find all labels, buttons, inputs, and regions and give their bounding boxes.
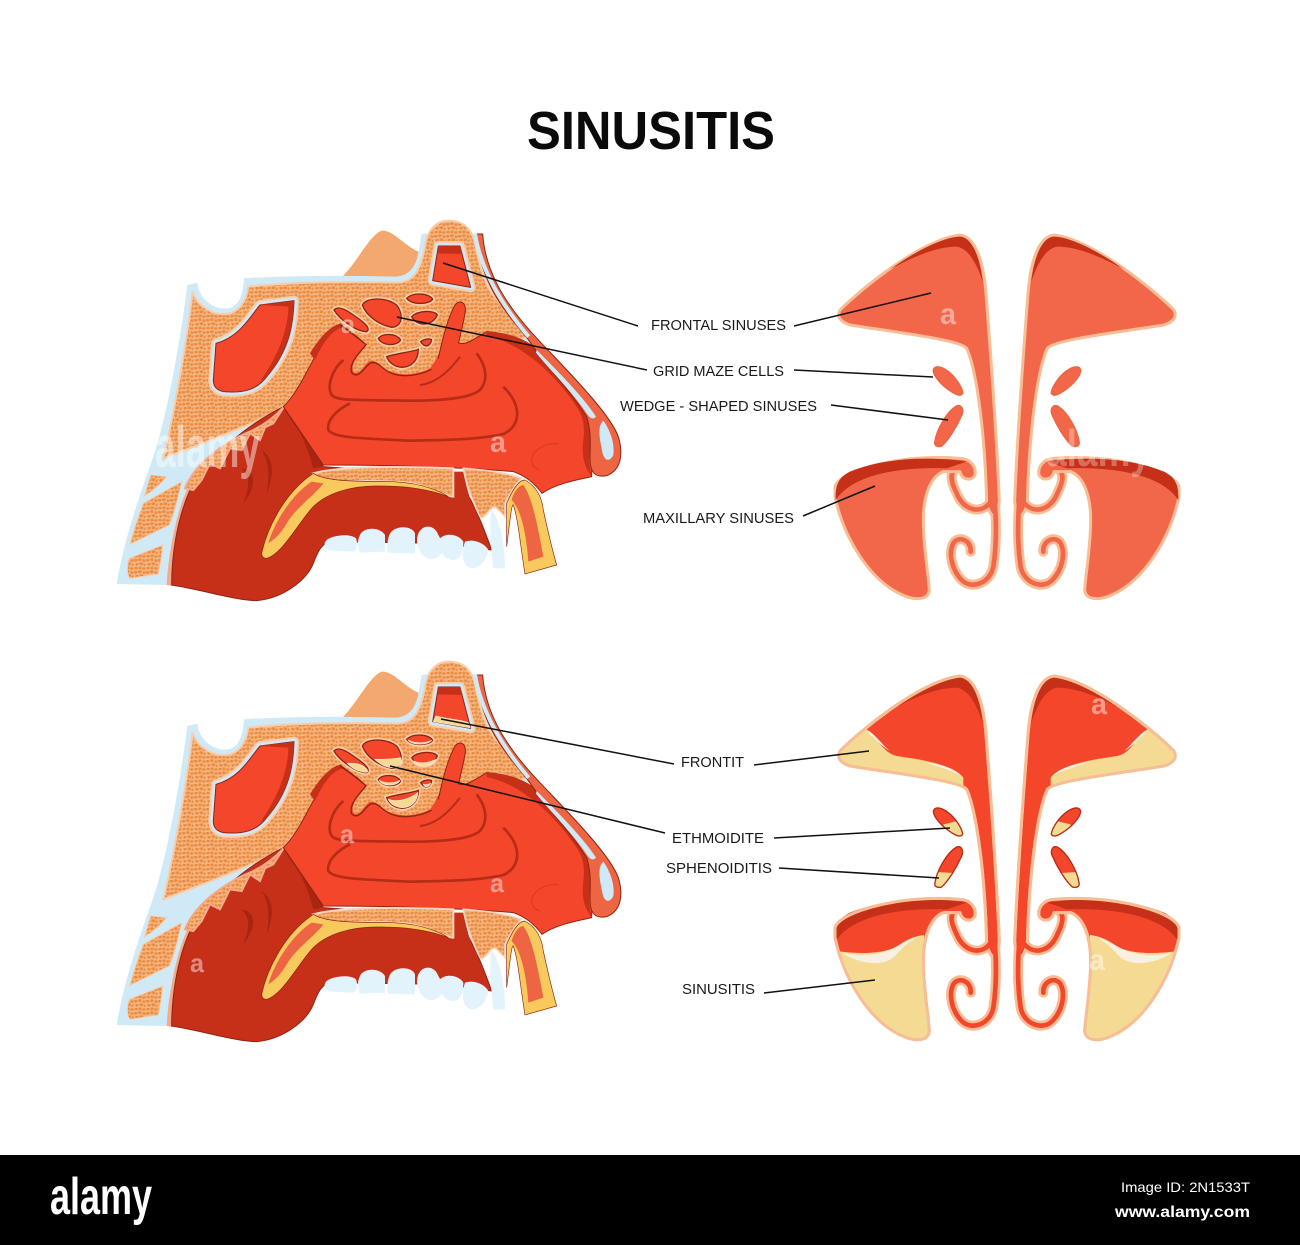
label: sphenoiditis: SPHENOIDITIS xyxy=(666,861,772,877)
head cross-section: inflamed xyxy=(117,662,621,1042)
title: SINUSITIS xyxy=(527,101,775,161)
right half xyxy=(1015,676,1184,1044)
watermarks: a xyxy=(341,309,356,339)
footer image id: Image ID: 2N1533T xyxy=(1121,1179,1250,1195)
label: sphenoiditis xyxy=(666,861,939,878)
fluid levels in head sinuses xyxy=(347,716,470,808)
label: maxillary sinuses xyxy=(643,486,875,527)
label: frontit: FRONTIT xyxy=(681,755,744,771)
label: frontit xyxy=(441,719,869,771)
label: sinusitis xyxy=(682,980,875,998)
watermarks: a xyxy=(490,868,505,898)
watermarks: a xyxy=(190,948,205,978)
footer logo: alamy xyxy=(50,1168,152,1226)
watermarks: alamy xyxy=(155,415,260,480)
watermarks xyxy=(155,298,1151,978)
label: grid maze cells: GRID MAZE CELLS xyxy=(653,364,784,380)
label: maxillary sinuses: MAXILLARY SINUSES xyxy=(643,511,794,527)
label: sinusitis: SINUSITIS xyxy=(682,982,755,998)
label: grid maze cells xyxy=(397,317,933,380)
sinus diagram: inflamed xyxy=(830,676,1184,1044)
right half xyxy=(1015,235,1179,599)
callouts: bottom row xyxy=(390,719,950,998)
footer bar xyxy=(0,1155,1300,1245)
label: ethmoidite xyxy=(390,766,950,847)
callouts: top row xyxy=(397,263,948,527)
label: ethmoidite: ETHMOIDITE xyxy=(672,831,764,847)
watermarks: a xyxy=(340,819,355,849)
watermarks: a xyxy=(1091,688,1107,721)
footer url: www.alamy.com xyxy=(1114,1204,1250,1221)
label: wedge-shaped sinuses: WEDGE - SHAPED SINUSES xyxy=(620,399,817,415)
left half xyxy=(830,676,999,1044)
watermarks: a xyxy=(1089,944,1105,977)
watermarks: a xyxy=(490,426,506,459)
left half xyxy=(835,235,999,599)
sinus diagram: healthy xyxy=(835,235,1179,599)
label: wedge-shaped sinuses xyxy=(620,399,948,420)
label: frontal sinuses: FRONTAL SINUSES xyxy=(651,318,786,334)
watermarks: alamy xyxy=(1046,420,1151,478)
label: frontal sinuses xyxy=(443,263,931,334)
head cross-section: healthy xyxy=(117,221,621,601)
watermarks: a xyxy=(940,298,956,331)
